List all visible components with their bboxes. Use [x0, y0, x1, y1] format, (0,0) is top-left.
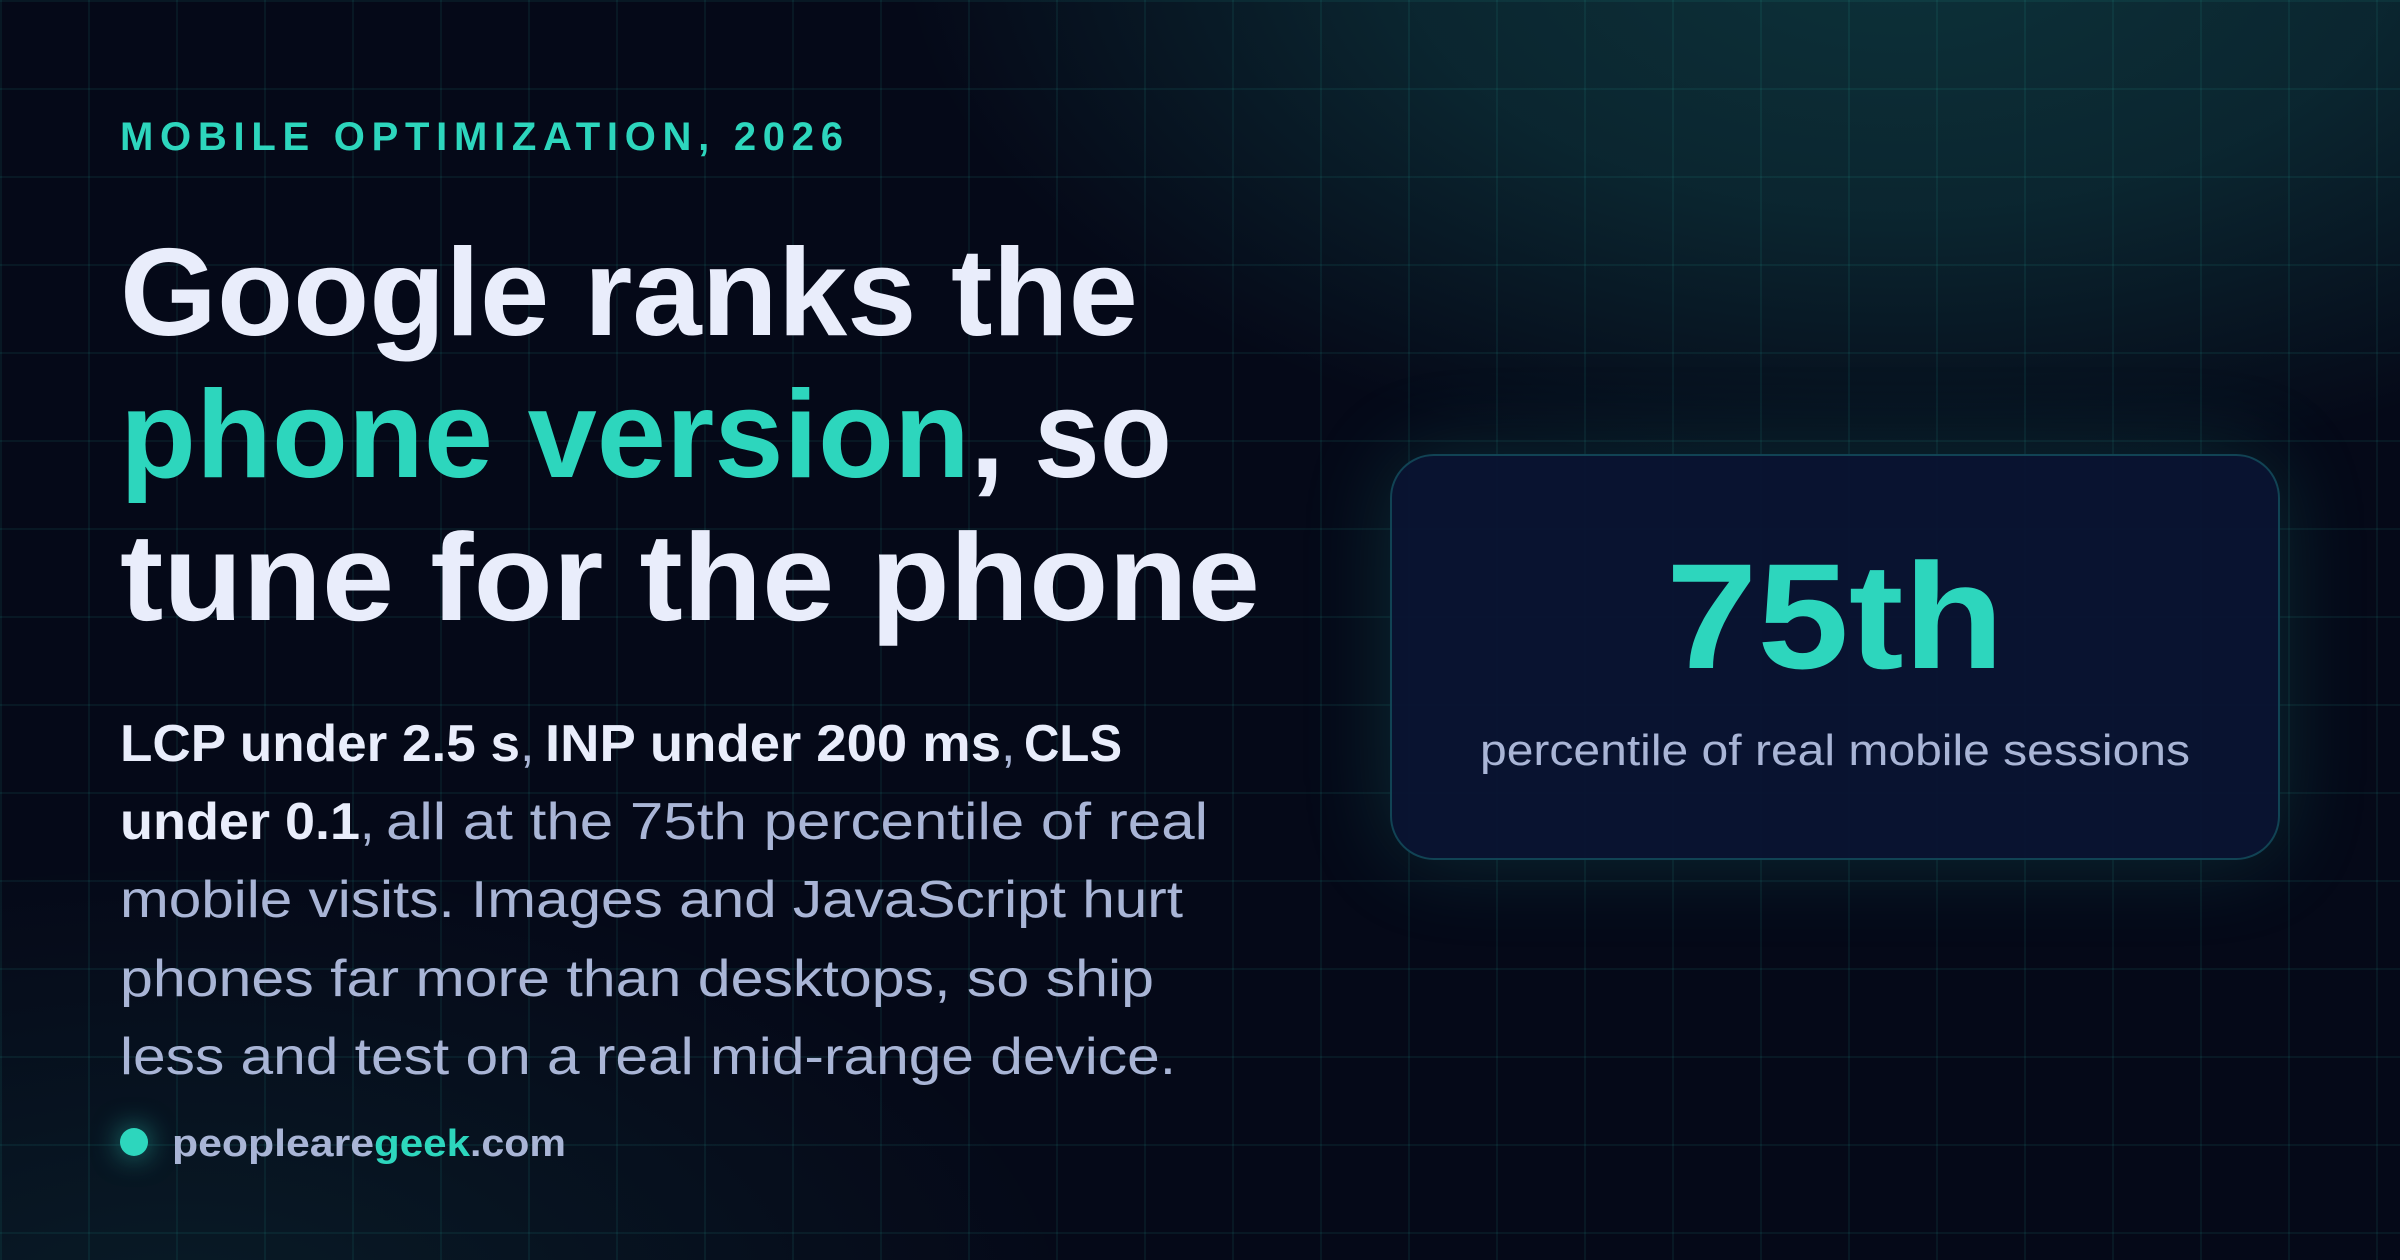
- body text: [120, 715, 1208, 1086]
- body text: CLS: [1024, 715, 1122, 773]
- stat caption: percentile of real mobile sessions: [1480, 726, 2190, 775]
- panel: stat card: [1390, 454, 2280, 860]
- body text: under 0.1: [120, 793, 360, 851]
- title: ,: [970, 366, 1004, 504]
- stat value: 75th: [1666, 532, 2004, 700]
- title: tune for the phone: [120, 509, 1260, 647]
- footer url: .com: [470, 1123, 566, 1165]
- body text: mobile visits. Images and JavaScript hurt: [120, 871, 1184, 929]
- body text: all at the 75th percentile of real: [386, 793, 1208, 851]
- icon: footer dot: [120, 1128, 148, 1156]
- footer url: peopleare: [172, 1123, 374, 1165]
- title: phone version: [120, 366, 970, 504]
- body text: ,: [1001, 715, 1015, 773]
- title: so: [1034, 366, 1172, 504]
- footer url: geek: [374, 1123, 471, 1165]
- body text: phones far more than desktops, so ship: [120, 950, 1154, 1008]
- eyebrow: MOBILE OPTIMIZATION, 2026: [120, 115, 843, 159]
- title: Google ranks the: [120, 224, 1138, 362]
- body text: ,: [360, 793, 374, 851]
- footer url: [172, 1123, 566, 1165]
- title: [120, 224, 1260, 647]
- body text: INP under 200 ms: [545, 715, 1001, 773]
- body text: LCP under 2.5 s: [120, 715, 520, 773]
- body text: less and test on a real mid-range device.: [120, 1028, 1176, 1086]
- body text: ,: [520, 715, 534, 773]
